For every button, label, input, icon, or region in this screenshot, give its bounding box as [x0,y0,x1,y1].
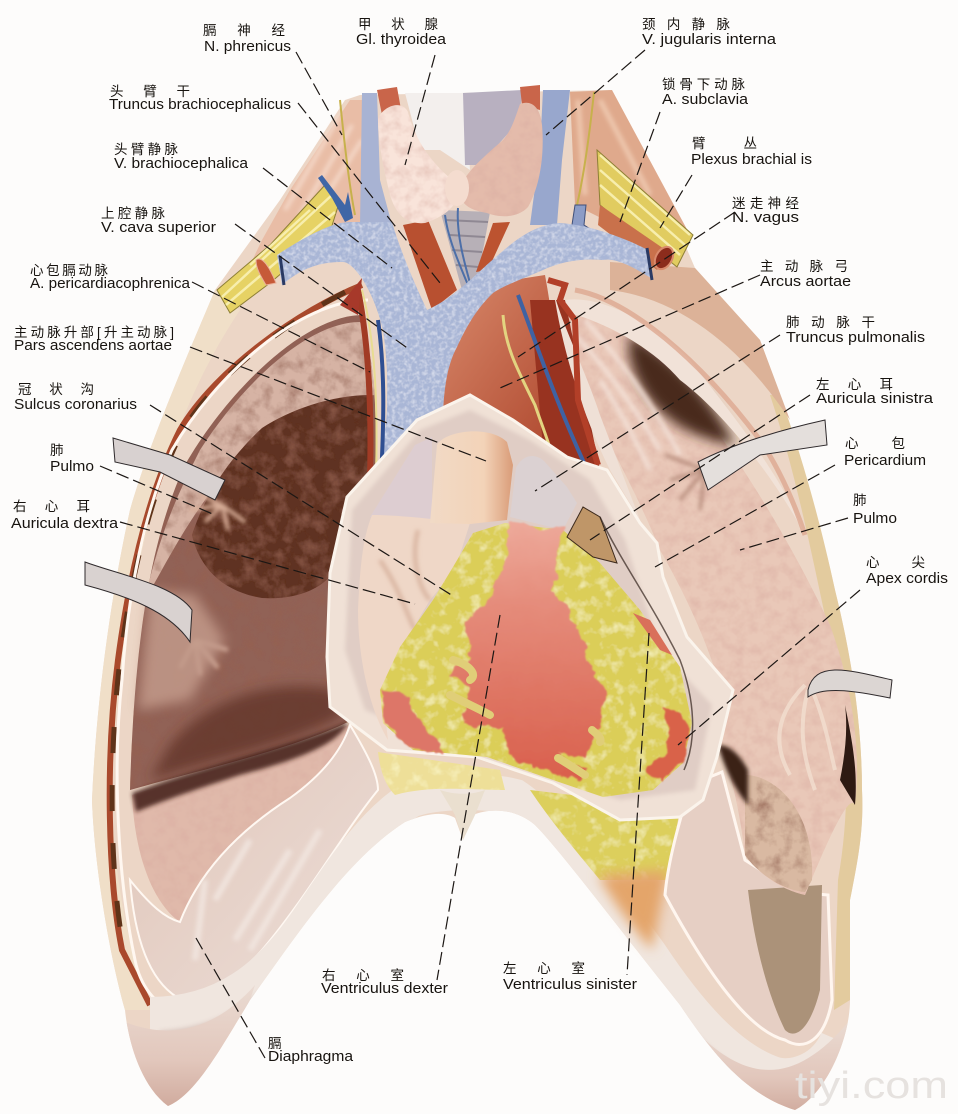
label: Truncus brachiocephalicus: Truncus brachiocephalicus [109,96,291,113]
central tendon notch [440,790,485,840]
heart edge shadow [600,517,693,770]
label: V. cava superior: 上腔静脉 [101,206,166,221]
pale pleura on right upper [565,299,805,535]
label: Pulmo right: Pulmo [853,510,897,527]
label: Arcus aortae: 主动脉弓 [760,259,848,274]
left ligament artery [548,280,598,465]
label: Auricula dextra: Auricula dextra [11,515,119,532]
label: Pericardium: Pericardium [844,452,926,469]
right diaphragm surface [665,772,832,1044]
dark left upper lobe [192,395,372,598]
label: Sulcus coronarius [14,382,137,413]
label: A. pericardiacophrenica [30,263,191,292]
left diaphragm fibres [195,830,320,960]
label: Ventriculus sinister: Ventriculus sinister [503,976,637,993]
nerve lines in neck [340,92,594,215]
aortic arch [440,275,560,440]
left neck muscle [250,100,372,265]
label: Apex cordis [866,555,948,587]
dark right lung edge [840,705,856,805]
internal thoracic vessels left [110,285,362,1005]
label: V. jugularis interna [642,17,777,48]
label: V. jugularis interna: V. jugularis interna [642,31,777,48]
leader lines [100,50,860,1058]
pale pleura band over left lung [145,322,375,600]
vein end caps [280,248,652,285]
pericardiacophrenic vessels [358,290,383,480]
label: V. brachiocephalica: 头臂静脉 [114,142,178,157]
left lung hilum fan upper [190,495,245,530]
dark area behind lung [718,745,748,805]
thyroid left lobe [378,105,459,223]
label: V. cava superior: V. cava superior [101,219,216,236]
label: Gl. thyroidea: 甲状腺 [358,17,438,32]
label: Pulmo right: 肺 [853,493,866,508]
label: Pulmo left: Pulmo [50,458,94,475]
label: V. brachiocephalica: V. brachiocephalica [114,155,249,172]
yellow fat fingers in muscle [450,660,601,775]
lower left pink patch [383,687,443,752]
label: A. subclavia: A. subclavia [662,91,749,108]
lower left lobe of diaphragm [125,985,255,1110]
left brachial plexus [217,185,340,313]
right carotid artery [476,222,510,272]
label: Truncus brachiocephalicus: 头臂干 [110,84,190,99]
strip: lower left retractor [85,562,192,642]
pericardium shadow fold [345,410,712,800]
label: Pericardium [844,436,926,469]
label: V. cava superior [101,206,216,236]
right auricle and atrium [358,515,470,740]
label: Plexus brachialis: Plexus brachial is [691,151,812,168]
left lung hilum fan lower [180,640,228,675]
label: Apex cordis: 心尖 [866,555,925,570]
dark left lower lung [150,687,342,780]
right auricle folds [380,530,430,630]
right outer chest wall strip [770,395,862,1010]
thyroid isthmus [445,170,469,206]
right lung lobe fan [779,685,835,790]
diaphragm band shadow [162,996,253,1030]
label: Diaphragma: 膈 [268,1036,282,1051]
pulmonary trunk [510,456,577,530]
label: Plexus brachialis: 臂丛 [692,136,757,151]
label: N. phrenicus [203,23,291,55]
left jugular vein [360,93,392,225]
strip: upper left retractor [113,438,225,500]
label: Pulmo left [50,443,94,475]
label: Ventriculus dexter: 右心室 [322,967,404,983]
right jugular vein [530,90,570,225]
label: Pars ascendens aortae: 主动脉升部[升主动脉] [14,325,174,340]
label: A. pericardiacophrenica: 心包膈动脉 [30,263,108,278]
left outer chest wall strip [92,290,240,1010]
right ventricle pink muscle [450,523,607,780]
nerve by aorta [503,315,552,455]
label: Truncus pulmonalis: 肺动脉干 [786,315,875,330]
trachea upper [405,93,470,170]
heart base fat layer [380,523,692,797]
right lung upper streaks [570,320,680,470]
watermark: tiyi.com [795,1065,948,1107]
left auricle [567,507,617,563]
label: Auricula sinistra: 左心耳 [816,377,893,392]
yellow fat at central diaphragm [378,752,505,795]
pericardium [327,395,733,820]
label: N. vagus: N. vagus [732,209,799,226]
right neck muscle fibres [578,100,650,195]
strip: right retractor [808,670,892,698]
orange fibres beneath pericardium [598,870,668,950]
label: Ventriculus dexter: Ventriculus dexter [321,980,448,997]
label: Auricula sinistra [816,377,934,407]
left carotid artery [403,220,457,310]
label: Pars ascendens aortae: Pars ascendens aortae [14,337,172,354]
label: Ventriculus sinister [503,960,637,993]
label: Auricula sinistra: Auricula sinistra [816,390,934,407]
label: Pars ascendens aortae [14,325,174,354]
left diaphragm surface [130,725,378,1000]
label: V. jugularis interna: 颈内静脉 [642,17,730,32]
label: A. subclavia: 锁骨下动脉 [662,77,746,92]
label: V. brachiocephalica [114,142,249,172]
brachiocephalic veins and superior vena cava [277,222,651,480]
label: Truncus pulmonalis [786,315,925,346]
artery stub left [340,278,362,315]
label: Arcus aortae: Arcus aortae [760,273,851,290]
yellow fat beneath pericardium [530,790,680,880]
lavender neck tissue [463,90,522,165]
thyroid veins [445,208,472,290]
label: Pulmo left: 肺 [50,443,64,458]
label: Plexus brachialis [691,136,812,168]
label: Ventriculus dexter [321,967,448,997]
grey-brown costal area [748,885,822,1034]
right subclavian artery [598,205,677,272]
body wall silhouette [92,90,862,1110]
illustration: open thorax [85,85,892,1114]
label: Auricula dextra [11,499,119,532]
thyroid right lobe [460,103,543,216]
diaphragm central band [125,792,850,1114]
label: Pulmo right [853,493,897,527]
left ventricle edge pink [633,613,672,655]
apex pink patch [647,707,692,780]
left subclavian artery [256,259,276,285]
right lung [556,303,857,895]
upper right wall muscle [610,262,790,420]
label: Pericardium: 心包 [845,436,905,451]
label: N. phrenicus: N. phrenicus [204,38,291,55]
ascending aorta [430,431,513,524]
left pleura border [117,300,368,1012]
blue vessel by aorta [518,295,585,465]
right lung lower lobe [745,775,812,892]
left neck muscle fibres [285,115,362,215]
label: Apex cordis: Apex cordis [866,570,948,587]
label: Sulcus coronarius: Sulcus coronarius [14,396,137,413]
left small vein [318,175,353,222]
upper arteries [377,85,540,115]
left lung lower pink lobe [132,725,348,922]
label: N. vagus: 迷走神经 [732,196,800,211]
pale lilac interior [370,437,432,522]
label: Auricula dextra: 右心耳 [13,499,90,514]
left lung cavity [130,315,376,790]
trachea rings [445,220,488,267]
label: A. subclavia [662,77,749,108]
trachea lower [440,210,490,290]
label: Gl. thyroidea: Gl. thyroidea [356,31,447,48]
left lung lateral pale zone [138,590,225,710]
strip: upper right retractor [698,420,827,490]
label: Diaphragma [268,1036,354,1065]
red pleural stripe right [575,290,805,535]
label: Diaphragma: Diaphragma [268,1048,354,1065]
label: Gl. thyroidea [356,17,447,48]
right brachial plexus [597,150,693,267]
label: Truncus brachiocephalicus [109,84,291,113]
label: N. vagus [732,196,800,226]
dark rim on lower left lobe [132,722,348,812]
rib pattern left [112,292,345,950]
label: A. pericardiacophrenica: A. pericardiacophrenica [30,275,191,292]
label: N. phrenicus: 膈神经 [203,23,286,38]
pulmonary region dark red [530,300,600,470]
label: Sulcus coronarius: 冠状沟 [18,382,94,397]
lower right lobe of diaphragm [706,1024,847,1110]
label: Truncus pulmonalis: Truncus pulmonalis [786,329,925,346]
label: Ventriculus sinister: 左心室 [503,960,585,976]
right lung hilum fan [665,455,705,510]
right neck muscle [570,90,690,245]
dark upper area on right lung [629,335,735,445]
pale tissue beside aorta [555,300,640,520]
right vein stump [570,205,595,238]
label: Arcus aortae [760,259,851,290]
